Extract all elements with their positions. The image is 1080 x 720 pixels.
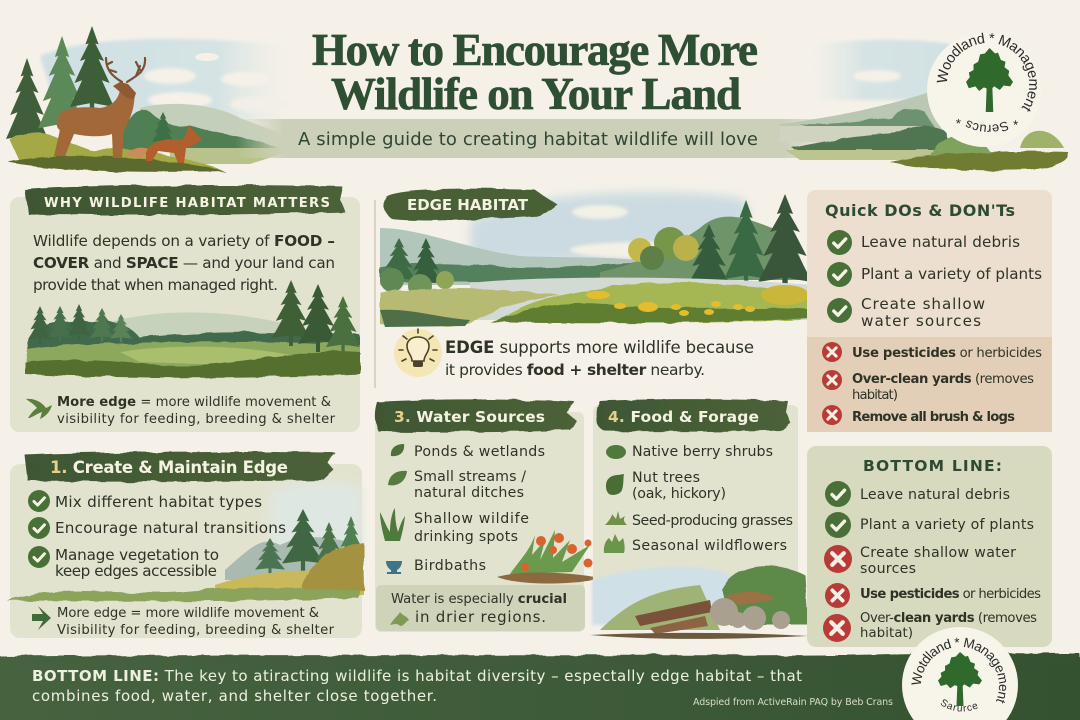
water list: drinking spots — [414, 529, 518, 545]
divider — [374, 200, 376, 388]
checklist: keep edges accessible — [55, 562, 217, 580]
icon: light bulb — [394, 329, 442, 377]
note: more edge: visibility for feeding, breeding & shelter — [57, 412, 336, 427]
panel: water sources — [375, 399, 600, 632]
header illustration: left scene with deer and fox — [6, 26, 300, 172]
icon: leaf pond — [391, 444, 404, 456]
logo: woodland management footer — [902, 627, 1018, 720]
food list: (oak, hickory) — [632, 486, 726, 502]
bottom line list: Use pesticides or herbicides — [860, 587, 1041, 602]
footer credit: Adspied from ActiveRain PAQ by Beb Crans — [693, 697, 893, 708]
banner: create and maintain edge — [25, 451, 335, 482]
note: more edge — [26, 395, 336, 427]
callout: water is crucial: Water is especially crucial — [391, 592, 567, 607]
bottom line list: sources — [860, 561, 916, 577]
checklist: Manage vegetation to — [55, 546, 219, 564]
water list — [414, 444, 545, 574]
banner: water sources — [375, 399, 576, 432]
banner: food and forage — [597, 399, 790, 432]
illustration: meadow edge — [6, 482, 364, 601]
subtitle band: A simple guide to creating habitat wildlife will love — [298, 129, 758, 150]
footer message: combines food, water, and shelter close together. — [32, 687, 437, 705]
logo: woodland management top right: * Serucs * — [956, 118, 1018, 132]
don't list: Use pesticides or herbicides — [852, 346, 1042, 361]
icon: grass tuft — [380, 508, 405, 541]
icon: leaf stream — [388, 471, 407, 485]
panel: quick dos and don'ts — [807, 190, 1052, 432]
panel: food and forage — [590, 399, 808, 639]
illustration: wildflowers on soil — [497, 530, 600, 584]
bottom line list: habitat) — [860, 626, 913, 641]
do list: Plant a variety of plants — [861, 265, 1042, 283]
fox — [124, 125, 202, 163]
food list: Seasonal wildflowers — [632, 538, 787, 554]
footer band — [0, 653, 1080, 720]
edge explanation text: it provides food + shelter nearby. — [445, 361, 705, 379]
bottom line list: Plant a variety of plants — [860, 517, 1034, 533]
edge explanation text: EDGE supports more wildlife because — [445, 338, 754, 357]
intro paragraph: COVER and SPACE — and your land can — [33, 254, 335, 272]
title: How to Encourage More — [312, 25, 758, 75]
banner: edge habitat: EDGE HABITAT — [407, 196, 529, 214]
do list: Leave natural debris — [861, 233, 1020, 251]
intro paragraph — [33, 232, 335, 294]
do list: Create shallow — [861, 295, 985, 313]
don't list: habitat) — [852, 388, 898, 403]
edge explanation text — [445, 338, 754, 379]
do list: water sources — [861, 312, 981, 330]
icon: wildflower foliage — [604, 534, 625, 553]
illustration: edge habitat meadow — [380, 192, 812, 327]
note: more edge with arrow: Visibility for feeding, breeding & shelter — [57, 623, 335, 638]
panel: edge habitat — [380, 189, 812, 379]
logo: woodland management footer: Wotdland * Management — [911, 638, 1006, 704]
banner: why wildlife habitat matters — [25, 185, 345, 215]
bottom line list: Over-clean yards (removes — [860, 611, 1037, 626]
banner: why wildlife habitat matters: WHY WILDLIFE HABITAT MATTERS — [44, 196, 330, 211]
illustration: brush pile and logs — [590, 567, 808, 639]
deer — [54, 58, 145, 158]
title — [312, 25, 758, 119]
water list: Shallow wildife — [414, 511, 529, 527]
logo: woodland management top right — [927, 32, 1037, 147]
intro paragraph: Wildlife depends on a variety of FOOD – — [33, 232, 335, 250]
footer message: BOTTOM LINE: The key to atiracting wildlife is habitat diversity – espectally edge habitat – that — [32, 667, 802, 685]
icon: nut — [606, 474, 624, 495]
bottom line list: Create shallow water — [860, 545, 1016, 561]
note: more edge: More edge = more wildlife movement & — [57, 395, 331, 410]
checklist — [28, 490, 286, 580]
water list: natural ditches — [414, 485, 524, 501]
banner: edge habitat — [384, 189, 557, 220]
checklist: Mix different habitat types — [55, 493, 262, 511]
panel: why wildlife habitat matters — [10, 185, 360, 432]
footer message — [32, 667, 802, 705]
heading: bottom line: BOTTOM LINE: — [863, 457, 1002, 475]
logo: woodland management footer: Sarurce — [940, 699, 978, 712]
intro paragraph: provide that when managed right. — [33, 276, 278, 294]
bottom line list — [823, 481, 1041, 642]
food list: Seed-producing grasses — [632, 513, 793, 529]
water list: Birdbaths — [414, 558, 486, 574]
icon: seed grass — [605, 511, 627, 525]
note: more edge with arrow — [32, 606, 335, 638]
icon: berry shrub leaf — [606, 445, 626, 459]
header illustration: right scene — [780, 40, 1068, 171]
don't list — [822, 342, 1042, 425]
icon: birdbath — [386, 561, 402, 574]
don't list: Remove all brush & logs — [852, 410, 1015, 425]
food list: Nut trees — [632, 470, 700, 486]
title: Wildlife on Your Land — [331, 69, 741, 119]
panel: create and maintain edge — [6, 451, 364, 638]
water list: Ponds & wetlands — [414, 444, 545, 460]
food list: Native berry shrubs — [632, 444, 773, 460]
water list: Small streams / — [414, 469, 526, 485]
food list — [632, 444, 793, 554]
heading: quick dos and don'ts: Quick DOs & DON'Ts — [825, 201, 1015, 220]
banner: water sources: 3. Water Sources — [394, 408, 545, 426]
subtitle band — [235, 119, 845, 158]
don't list: Over-clean yards (removes — [852, 372, 1034, 387]
panel: bottom line list — [807, 446, 1052, 647]
banner: food and forage: 4. Food & Forage — [608, 408, 759, 426]
bottom line list: Leave natural debris — [860, 487, 1010, 503]
do list — [827, 230, 1042, 330]
note: more edge with arrow: More edge = more wildlife movement & — [57, 606, 319, 621]
callout: water is crucial — [376, 585, 585, 631]
forest meadow illustration — [25, 280, 360, 378]
banner: create and maintain edge: 1. Create & Maintain Edge — [50, 458, 288, 477]
checklist: Encourage natural transitions — [55, 519, 286, 537]
logo: woodland management top right: Woodland * Management — [936, 32, 1037, 112]
callout: water is crucial: in drier regions. — [415, 608, 546, 626]
